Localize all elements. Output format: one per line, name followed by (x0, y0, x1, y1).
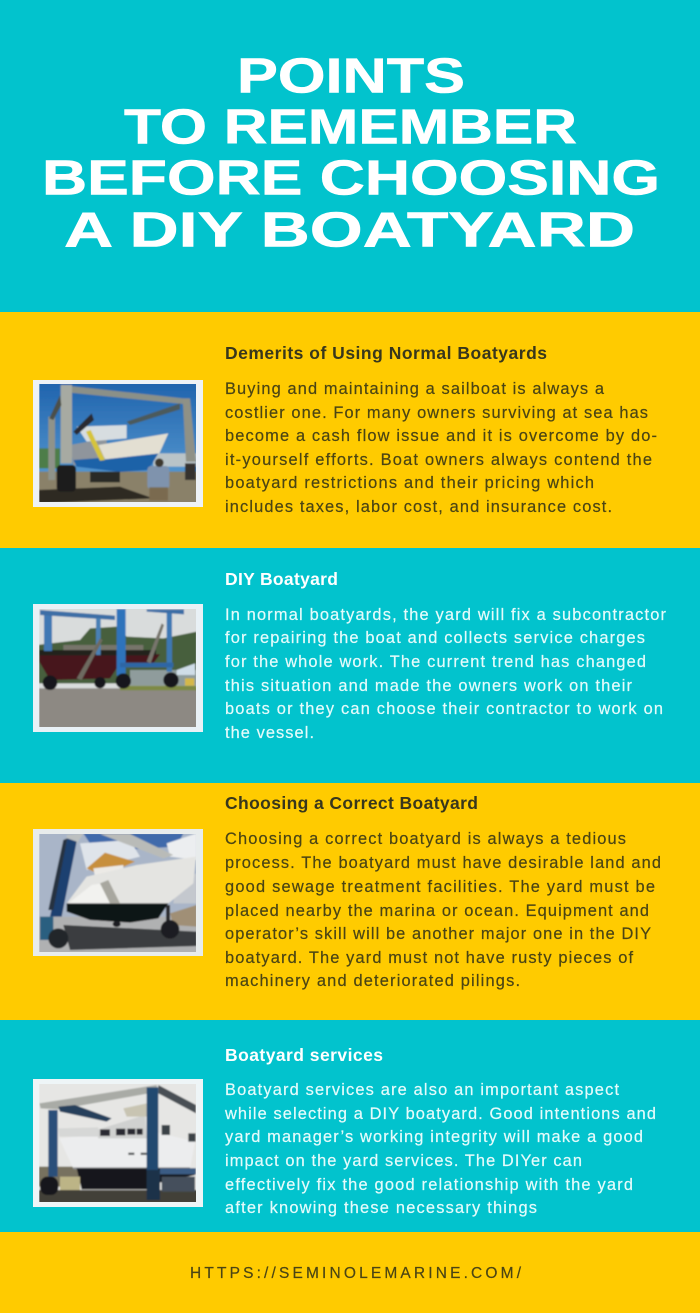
body text: it-yourself efforts. Boat owners always contend the (225, 451, 652, 469)
body text: In normal boatyards, the yard will fix a subcontractor (225, 606, 667, 624)
body text: process. The boatyard must have desirable land and (225, 854, 661, 872)
panel: boatyard services (33, 1048, 656, 1217)
body text: while selecting a DIY boatyard. Good intentions and (224, 1105, 656, 1123)
header background (0, 0, 700, 312)
body text: operator’s skill will be another major one in the DIY (225, 925, 651, 943)
panel: DIY boatyard (33, 572, 666, 738)
body text: boatyard. The yard must not have rusty pieces of (225, 949, 633, 967)
photo: white yacht under gantry (33, 1079, 203, 1207)
heading: Demerits of Using Normal Boatyards (225, 343, 547, 363)
heading: Boatyard services (225, 1045, 383, 1065)
website url: HTTPS://SEMINOLEMARINE.COM/ (190, 1265, 522, 1282)
photo: red boat in blue lift (33, 604, 203, 732)
body text: after knowing these necessary things (225, 1199, 537, 1217)
body text: machinery and deteriorated pilings. (225, 972, 520, 990)
body text (225, 606, 667, 742)
title (42, 50, 660, 258)
body text: Buying and maintaining a sailboat is always a (225, 380, 605, 398)
footer (0, 1232, 700, 1313)
photo: sailboat in travel lift (33, 380, 203, 507)
title: A DIY BOATYARD (64, 204, 635, 258)
body text: good sewage treatment facilities. The yard must be (225, 878, 655, 896)
body text: boats or they can choose their contractor to work on (225, 700, 663, 718)
photo: motor yacht on lift (33, 829, 203, 956)
body text: includes taxes, labor cost, and insurance cost. (225, 498, 612, 516)
heading: Choosing a Correct Boatyard (225, 793, 478, 813)
body text (224, 1081, 656, 1217)
body text: costlier one. For many owners surviving at sea has (225, 404, 648, 422)
body text: become a cash flow issue and it is overcome by do- (225, 427, 657, 445)
body text: impact on the yard services. The DIYer can (225, 1152, 582, 1170)
body text: effectively fix the good relationship with the yard (225, 1176, 633, 1194)
title: TO REMEMBER (124, 100, 577, 154)
body text: boatyard restrictions and their pricing which (225, 474, 594, 492)
body text: the vessel. (225, 724, 314, 742)
heading: DIY Boatyard (225, 569, 338, 589)
body text: Choosing a correct boatyard is always a tedious (225, 830, 626, 848)
body text (225, 830, 661, 990)
title: BEFORE CHOOSING (42, 152, 660, 206)
body text (225, 380, 657, 516)
body text: for repairing the boat and collects service charges (225, 629, 645, 647)
body text: Boatyard services are also an important aspect (225, 1081, 619, 1099)
panel: demerits of using normal boatyards (0, 312, 700, 548)
title: POINTS (237, 50, 465, 104)
body text: this situation and made the owners work on their (225, 677, 633, 695)
body text: for the whole work. The current trend has changed (225, 653, 646, 671)
body text: yard manager’s working integrity will make a good (225, 1128, 643, 1146)
panel: choosing a correct boatyard (0, 783, 700, 1020)
body text: placed nearby the marina or ocean. Equipment and (225, 902, 649, 920)
